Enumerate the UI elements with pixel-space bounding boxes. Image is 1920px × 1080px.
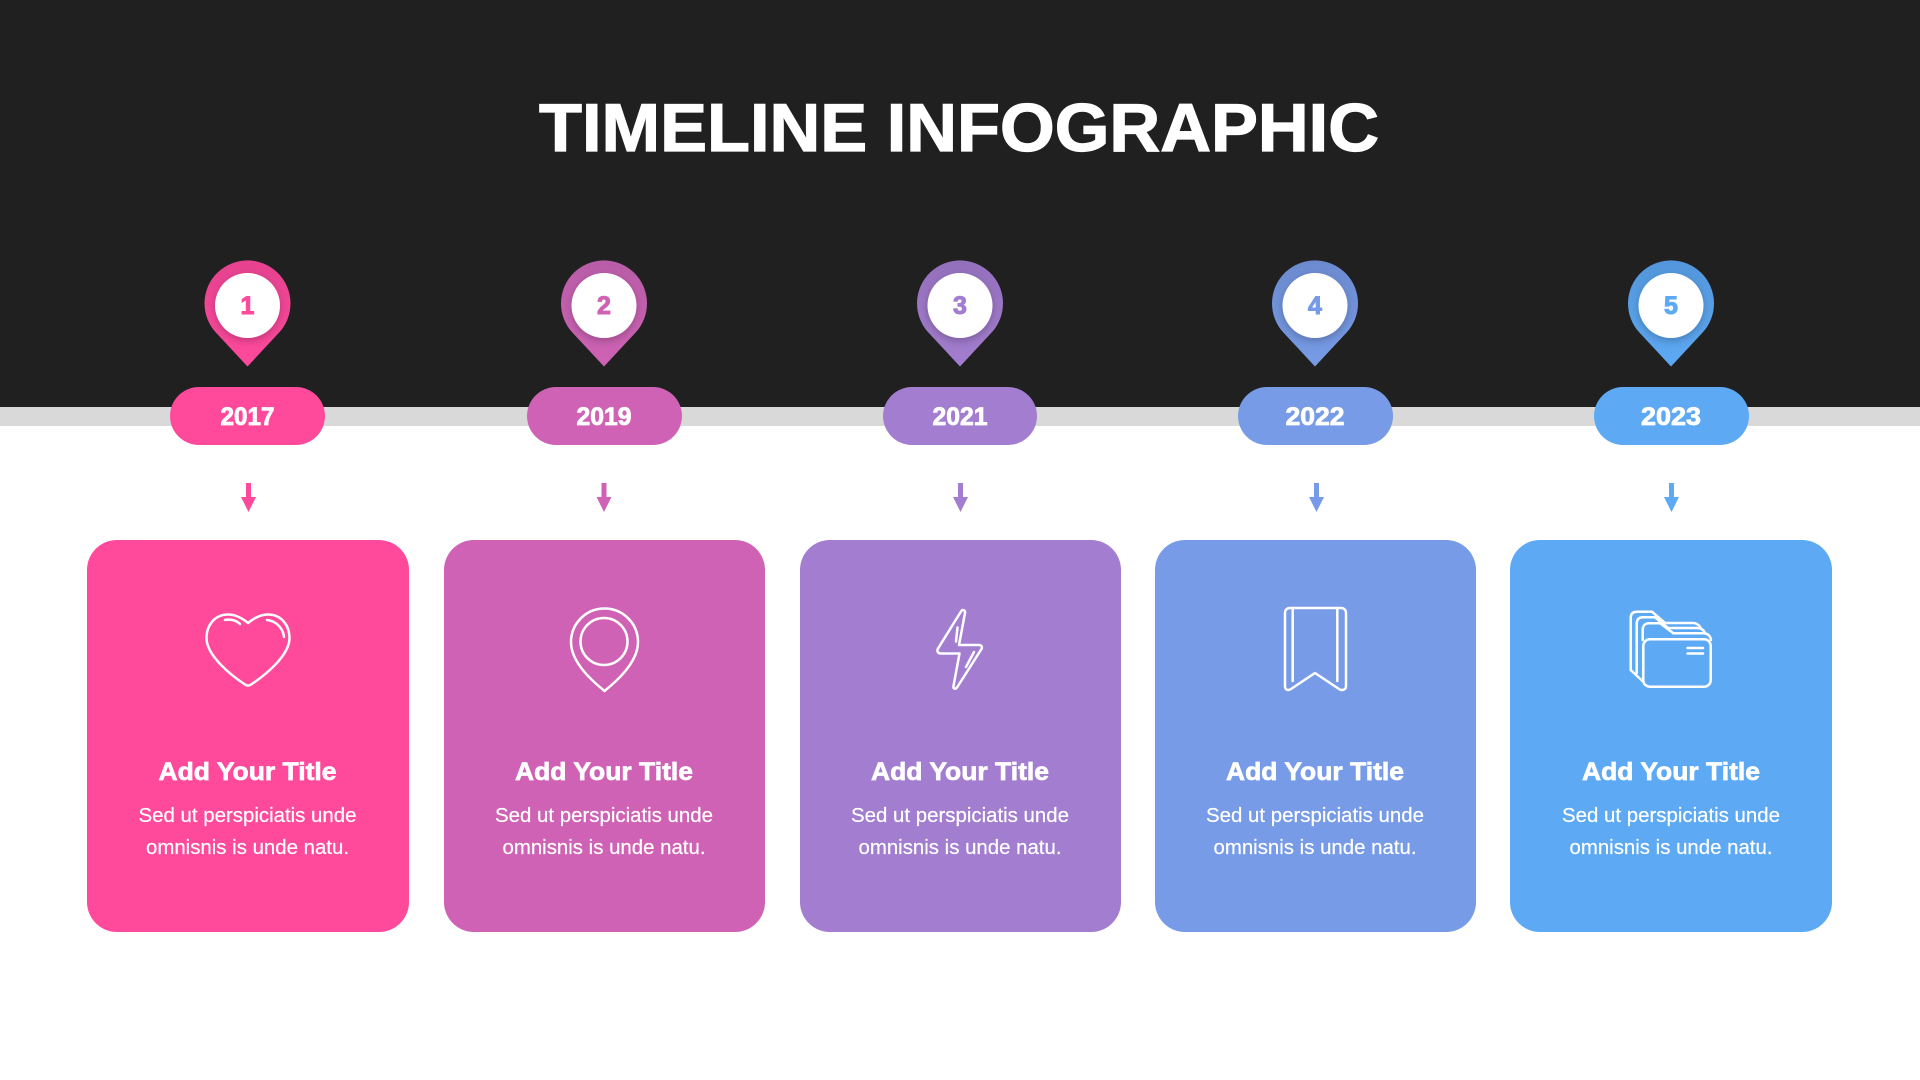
card 4 description — [1206, 805, 1424, 859]
panel: card 3 — [800, 540, 1121, 932]
card 2 description — [495, 805, 713, 859]
milestone 5: pin: 5 — [1664, 292, 1678, 320]
milestone 4: year pill — [1238, 387, 1393, 445]
milestone 2: year pill — [527, 387, 682, 445]
milestone 3: year pill: 2021 — [932, 403, 988, 431]
card 1 description — [138, 805, 356, 859]
panel: card 2 — [444, 540, 765, 932]
milestone 5: year pill — [1594, 387, 1749, 445]
panel: card 1 — [87, 540, 409, 932]
card 3 description: omnisnis is unde natu. — [858, 837, 1062, 859]
milestone 5: year pill: 2023 — [1641, 403, 1701, 431]
icon: location pin — [571, 608, 638, 691]
timeline bar — [0, 407, 1920, 426]
milestone 2: pin: 2 — [597, 292, 611, 320]
icon: bookmark — [1285, 608, 1346, 690]
card 2 title: Add Your Title — [515, 758, 693, 786]
card 4 description: omnisnis is unde natu. — [1214, 837, 1416, 859]
milestone 5: pin — [1628, 260, 1714, 366]
card 2 description: omnisnis is unde natu. — [502, 837, 706, 859]
card 4 title: Add Your Title — [1226, 758, 1404, 786]
card 3 description — [851, 805, 1069, 859]
milestone 4: year pill: 2022 — [1286, 403, 1344, 431]
title: TIMELINE INFOGRAPHIC — [539, 90, 1379, 166]
card 5 title: Add Your Title — [1582, 758, 1760, 786]
card 5 description: omnisnis is unde natu. — [1570, 837, 1772, 859]
milestone 2: year pill: 2019 — [576, 403, 632, 431]
milestone 4: pin — [1272, 260, 1358, 366]
card 1 description: Sed ut perspiciatis unde — [138, 805, 356, 827]
icon: folders — [1631, 612, 1711, 687]
card 5 description: Sed ut perspiciatis unde — [1562, 805, 1780, 827]
card 1 description: omnisnis is unde natu. — [146, 837, 349, 859]
milestone 1: pin — [204, 260, 290, 366]
milestone 2: pin — [561, 260, 647, 366]
milestone 5: arrow — [1664, 483, 1679, 512]
milestone 2: arrow — [596, 483, 612, 512]
milestone 3: year pill — [883, 387, 1037, 445]
card 1 title: Add Your Title — [158, 758, 337, 786]
card 2 description: Sed ut perspiciatis unde — [495, 805, 713, 827]
card 3 title: Add Your Title — [871, 758, 1049, 786]
milestone 1: year pill: 2017 — [220, 403, 274, 431]
card 3 description: Sed ut perspiciatis unde — [851, 805, 1069, 827]
milestone 4: pin: 4 — [1308, 292, 1322, 320]
icon: lightning bolt — [937, 610, 982, 689]
card 4 description: Sed ut perspiciatis unde — [1206, 805, 1424, 827]
icon: heart — [206, 614, 290, 686]
panel: card 5 — [1510, 540, 1832, 932]
milestone 4: arrow — [1309, 483, 1324, 512]
milestone 3: pin: 3 — [953, 292, 967, 320]
milestone 3: arrow — [953, 483, 968, 512]
milestone 3: pin — [917, 260, 1003, 366]
card 5 description — [1562, 805, 1780, 859]
header background — [0, 0, 1920, 407]
milestone 1: year pill — [170, 387, 325, 445]
panel: card 4 — [1155, 540, 1476, 932]
milestone 1: arrow — [241, 483, 256, 512]
milestone 1: pin: 1 — [241, 292, 255, 320]
